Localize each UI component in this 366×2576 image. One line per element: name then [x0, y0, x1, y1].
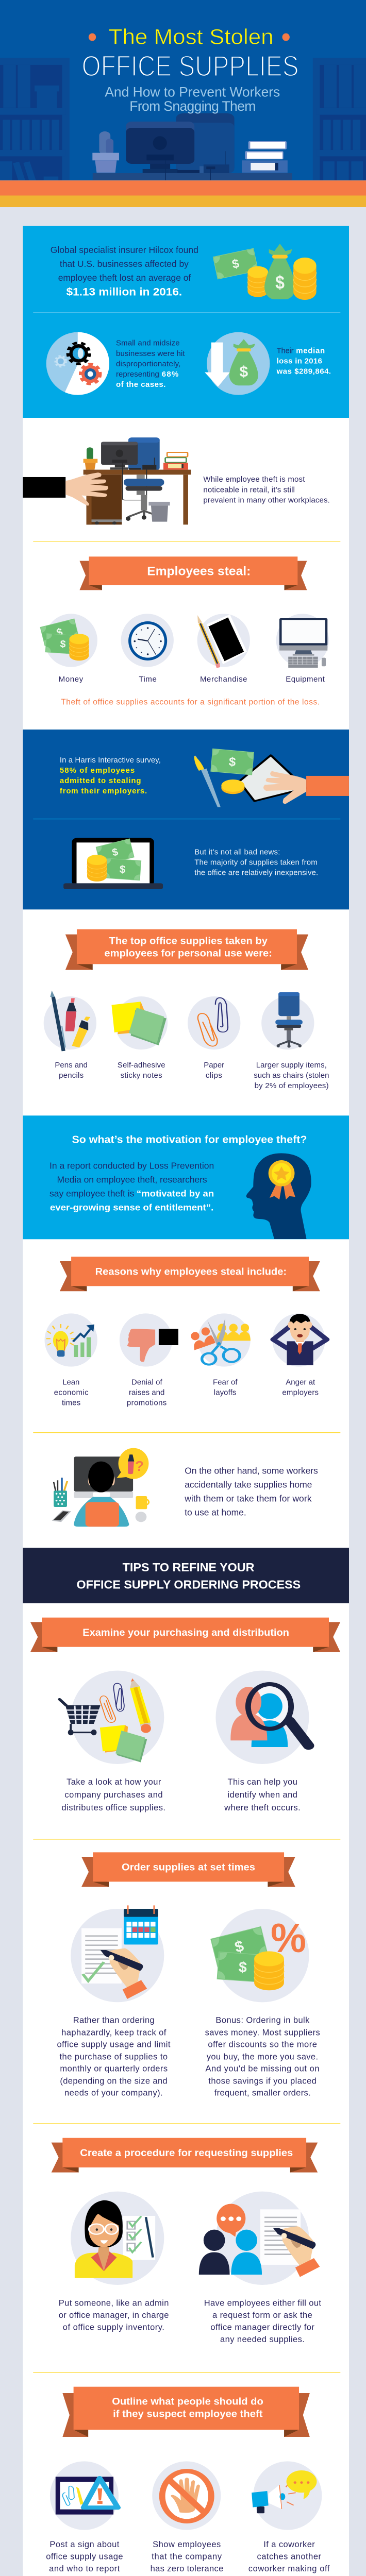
text: median loss: Their	[277, 347, 294, 355]
text: examine left: distributes office supplies.	[62, 1803, 165, 1812]
text: not all bad news: The majority of supplies taken from	[194, 858, 318, 867]
illustration: worker at computer: ?	[135, 1458, 144, 1474]
icon: scissors cutting staff	[191, 1313, 251, 1367]
text: procedure right: a request form or ask the	[212, 2311, 312, 2320]
text: report: say employee theft is	[49, 1188, 135, 1198]
text: zero tolerance: has zero tolerance	[151, 2564, 223, 2573]
banner: top office supplies	[65, 929, 308, 970]
text: order right: those savings if you placed	[208, 2076, 317, 2086]
panel: accidental theft	[52, 1448, 318, 1527]
icon: paper clips	[188, 996, 240, 1049]
text: retail: While employee theft is most	[203, 475, 305, 484]
panel: motivation	[23, 1115, 349, 1239]
labels: reasons: employers	[282, 1388, 319, 1397]
text: procedure right: Have employees either fill out	[204, 2298, 321, 2308]
icon: money	[40, 614, 97, 667]
illustration: hand taking tablet, pen and cash	[194, 749, 349, 807]
text: small businesses	[116, 339, 185, 389]
text: small businesses: 68%	[162, 370, 178, 379]
text: order right: And you'd be missing out on	[205, 2064, 320, 2074]
icon: money bag with coins and bill	[213, 244, 317, 300]
labels: reasons: raises and	[129, 1388, 164, 1397]
icon: money: $	[60, 638, 66, 650]
section: examine purchasing and distribution	[30, 1618, 340, 1840]
text: order left: haphazardly, keep track of	[61, 2028, 167, 2037]
banner: employees steal: Employees steal:	[147, 565, 251, 579]
labels: top supplies: Pens and	[55, 1061, 88, 1070]
icon: clock	[121, 614, 174, 667]
icon: money bag with coins and bill: $	[231, 257, 241, 272]
text: small businesses: Small and midsize	[116, 339, 180, 348]
icon: sticky notes	[111, 996, 168, 1049]
icon: office chair	[261, 992, 314, 1049]
intro text: $1.13 million in 2016.	[66, 286, 182, 298]
text: procedure left: Put someone, like an admin	[59, 2298, 169, 2308]
illustration: hand stealing from desk	[23, 437, 191, 524]
panel: retail theft	[23, 437, 340, 541]
text: order left: needs of your company).	[64, 2089, 163, 2098]
text: survey	[60, 756, 161, 795]
text: examine right: identify when and	[228, 1790, 297, 1800]
text: order left: office supply usage and limit	[57, 2040, 171, 2049]
labels: top supplies: Paper	[204, 1061, 224, 1070]
text: examine left	[62, 1777, 165, 1812]
text: median loss: loss in 2016	[277, 357, 322, 366]
text: examine right: where theft occurs.	[224, 1803, 301, 1812]
panel: harris survey	[23, 730, 349, 909]
labels: top supplies: clips	[206, 1071, 222, 1080]
text: examine left: Take a look at how your	[66, 1777, 161, 1787]
labels: top supplies: by 2% of employees)	[255, 1081, 329, 1090]
labels: reasons: Denial of	[131, 1378, 163, 1386]
icon: money bag with down arrow: $	[239, 363, 248, 380]
section: order supplies at set times	[33, 1852, 340, 2124]
labels: top supplies	[55, 1061, 329, 1090]
hero yellow band	[0, 196, 366, 207]
banner: procedure: Create a procedure for requesting supplies	[80, 2148, 293, 2159]
text: report: ever-growing sense of entitlement”.	[50, 1202, 213, 1212]
text: order right	[205, 2016, 320, 2098]
hero orange band	[0, 180, 366, 196]
text: not all bad news: But it’s not all bad news:	[194, 848, 280, 856]
labels: reasons: layoffs	[214, 1388, 236, 1397]
text: survey: In a Harris Interactive survey,	[60, 756, 161, 765]
panel: tips heading: OFFICE SUPPLY ORDERING PROCESS	[76, 1578, 301, 1591]
text: small businesses: of the cases.	[116, 380, 165, 389]
icon: merchandise	[197, 614, 250, 668]
panel: intro statistics	[23, 226, 349, 418]
text: retail: prevalent in many other workplaces.	[203, 496, 330, 504]
labels: reasons: Anger at	[286, 1378, 315, 1386]
icon: cash, coins and percent: %	[271, 1915, 306, 1961]
icon: head with medal	[246, 1153, 311, 1239]
labels: reasons: times	[62, 1398, 80, 1407]
text: accidental: On the other hand, some workers	[185, 1465, 318, 1476]
icon: cash, coins and percent	[211, 1909, 309, 2002]
text: survey: from their employers.	[60, 787, 147, 795]
icon: money bag with down arrow	[205, 332, 270, 395]
banner: top office supplies: employees for personal use were:	[104, 948, 272, 959]
text: post a sign: office supply usage	[46, 2552, 123, 2562]
icon: stressed man	[272, 1313, 327, 1367]
icon: megaphone	[252, 2461, 322, 2530]
icon: laptop with cash	[63, 838, 163, 889]
labels: what employees steal: Money	[59, 675, 84, 684]
banner: procedure	[52, 2138, 318, 2173]
icon: cash, coins and percent: $	[238, 1959, 247, 1976]
text: accidental: to use at home.	[185, 1507, 246, 1517]
panel: tips heading: TIPS TO REFINE YOUR	[123, 1561, 255, 1574]
text: small businesses: disproportionately,	[116, 360, 180, 368]
banner: reasons	[60, 1257, 320, 1291]
text: zero tolerance: Show employees	[153, 2540, 221, 2549]
text: post a sign	[46, 2540, 123, 2576]
icon: magnifier on people	[215, 1671, 309, 1764]
text: median loss: median	[296, 347, 325, 355]
labels: reasons: promotions	[127, 1398, 167, 1407]
text: examine right: This can help you	[228, 1777, 297, 1787]
labels: top supplies: Self-adhesive	[118, 1061, 165, 1070]
text: accidental: accidentally take supplies home	[185, 1479, 312, 1489]
intro text	[51, 245, 198, 298]
white content column	[23, 418, 349, 2576]
heading: motivation: So what’s the motivation for employee theft?	[72, 1134, 307, 1146]
title line 2: OFFICE SUPPLIES	[81, 50, 299, 83]
labels: what employees steal: Time	[139, 675, 157, 684]
text: report: “motivated by an	[137, 1188, 214, 1198]
text: median loss	[276, 347, 331, 376]
banner: outline: Outline what people should do	[112, 2396, 263, 2407]
text: not all bad news	[194, 848, 318, 877]
icon: office manager with checklist	[71, 2192, 164, 2285]
text: examine left: company purchases and	[64, 1790, 163, 1800]
icon: no entry hand	[152, 2461, 221, 2530]
text: order left: (depending on the size and	[60, 2076, 168, 2086]
banner: examine	[30, 1618, 340, 1652]
text: not all bad news: the office are relatively inexpensive.	[194, 868, 318, 877]
section: create a procedure	[33, 2138, 340, 2372]
icon: laptop with cash: $	[119, 863, 126, 876]
hero desk illustration	[92, 113, 292, 180]
text: order right: offer discounts so the more	[208, 2040, 317, 2049]
panel: employees steal	[40, 556, 329, 706]
text: order right: Bonus: Ordering in bulk	[215, 2016, 310, 2025]
banner: order	[81, 1852, 295, 1887]
text: coworker	[248, 2540, 330, 2576]
panel: tips heading	[23, 1548, 349, 1603]
banner: reasons: Reasons why employees steal include:	[95, 1266, 287, 1277]
bookshelves	[0, 58, 366, 180]
text: order left: monthly or quarterly orders	[60, 2064, 168, 2074]
illustration: worker at computer	[52, 1448, 149, 1527]
text: order left: the purchase of supplies to	[60, 2052, 168, 2061]
icon: cart with supplies	[59, 1671, 164, 1764]
icon: money: $	[56, 626, 64, 639]
icon: money bag with coins and bill: $	[275, 273, 285, 293]
icon: request and speech bubble	[199, 2192, 320, 2285]
intro text: Global specialist insurer Hilcox found	[51, 245, 198, 255]
text: order left: Rather than ordering	[73, 2016, 155, 2025]
section: outline what people should do	[33, 2387, 340, 2576]
illustration: hand taking tablet, pen and cash: $	[228, 755, 237, 769]
icon: gears on pie chart	[46, 332, 109, 395]
icon: laptop with cash: $	[111, 846, 119, 859]
text: median loss: was $289,864.	[276, 367, 331, 376]
banner: order: Order supplies at set times	[122, 1862, 255, 1873]
text: zero tolerance	[149, 2540, 224, 2576]
intro text: that U.S. businesses affected by	[60, 259, 189, 269]
text: procedure right: any needed supplies.	[220, 2335, 305, 2344]
banner: examine: Examine your purchasing and distribution	[82, 1628, 289, 1638]
icon: computer	[276, 614, 329, 668]
text: zero tolerance: that the company	[152, 2552, 222, 2562]
icon: thumbs down	[120, 1313, 178, 1367]
icon: cash, coins and percent: $	[233, 1938, 246, 1956]
text: post a sign: and who to report	[49, 2564, 120, 2573]
text: survey: 58% of employees	[60, 766, 135, 775]
text: report	[49, 1160, 214, 1212]
text: retail: noticeable in retail, it’s still	[203, 485, 295, 494]
subtitle	[105, 84, 280, 114]
text: procedure left: or office manager, in charge	[59, 2311, 169, 2320]
text: order right: frequent, smaller orders.	[214, 2089, 311, 2098]
labels: top supplies: such as chairs (stolen	[254, 1071, 329, 1080]
subtitle: And How to Prevent Workers	[105, 84, 280, 99]
icon: lean economic times	[44, 1313, 97, 1367]
labels: what employees steal	[59, 675, 325, 684]
icon: calendar and checklist	[71, 1905, 164, 2002]
icon: pens and pencils	[44, 991, 96, 1051]
text: procedure left: of office supply inventory.	[63, 2323, 164, 2332]
text: procedure right	[204, 2298, 321, 2344]
icon: warning sign	[50, 2461, 119, 2530]
panel: top office supplies	[44, 929, 329, 1090]
text: coworker: coworker making off	[248, 2564, 330, 2573]
banner: employees steal	[79, 556, 307, 590]
labels: reasons	[54, 1378, 319, 1407]
labels: top supplies: Larger supply items,	[256, 1061, 327, 1070]
text: accidental	[184, 1465, 318, 1517]
labels: reasons: Lean	[62, 1378, 79, 1386]
intro text: employee theft lost an average of	[58, 273, 191, 283]
text: small businesses: businesses were hit	[116, 349, 185, 358]
banner: outline: if they suspect employee theft	[113, 2409, 263, 2420]
title line 1: The Most Stolen	[109, 25, 274, 49]
labels: reasons: economic	[54, 1388, 89, 1397]
text: procedure right: office manager directly for	[210, 2323, 314, 2332]
labels: what employees steal: Merchandise	[200, 675, 247, 684]
note: theft of office supplies: Theft of office supplies accounts for a significant portion of the loss.	[61, 698, 320, 706]
text: report: Media on employee theft, researchers	[57, 1174, 207, 1184]
subtitle: From Snagging Them	[129, 98, 256, 114]
text: coworker: catches another	[257, 2552, 322, 2562]
text: post a sign: Post a sign about	[49, 2540, 120, 2549]
text: survey: admitted to stealing	[60, 776, 141, 785]
panel: reasons why employees steal	[33, 1257, 340, 1433]
labels: top supplies: pencils	[59, 1071, 84, 1080]
text: order right: you buy, the more you save.	[207, 2052, 318, 2061]
text: accidental: with them or take them for work	[184, 1493, 312, 1503]
text: order left	[57, 2016, 171, 2098]
banner: top office supplies: The top office supplies taken by	[109, 936, 268, 947]
text: coworker: If a coworker	[263, 2540, 315, 2549]
labels: what employees steal: Equipment	[286, 675, 325, 684]
text: procedure left	[59, 2298, 169, 2332]
text: small businesses: representing	[116, 370, 159, 379]
text: retail	[203, 475, 330, 504]
labels: reasons: Fear of	[213, 1378, 238, 1386]
text: report: In a report conducted by Loss Prevention	[49, 1160, 214, 1171]
hero header	[0, 0, 366, 207]
banner: outline	[62, 2387, 310, 2437]
text: order right: saves money. Most suppliers	[205, 2028, 320, 2037]
text: examine right	[224, 1777, 301, 1812]
labels: top supplies: sticky notes	[121, 1071, 162, 1080]
